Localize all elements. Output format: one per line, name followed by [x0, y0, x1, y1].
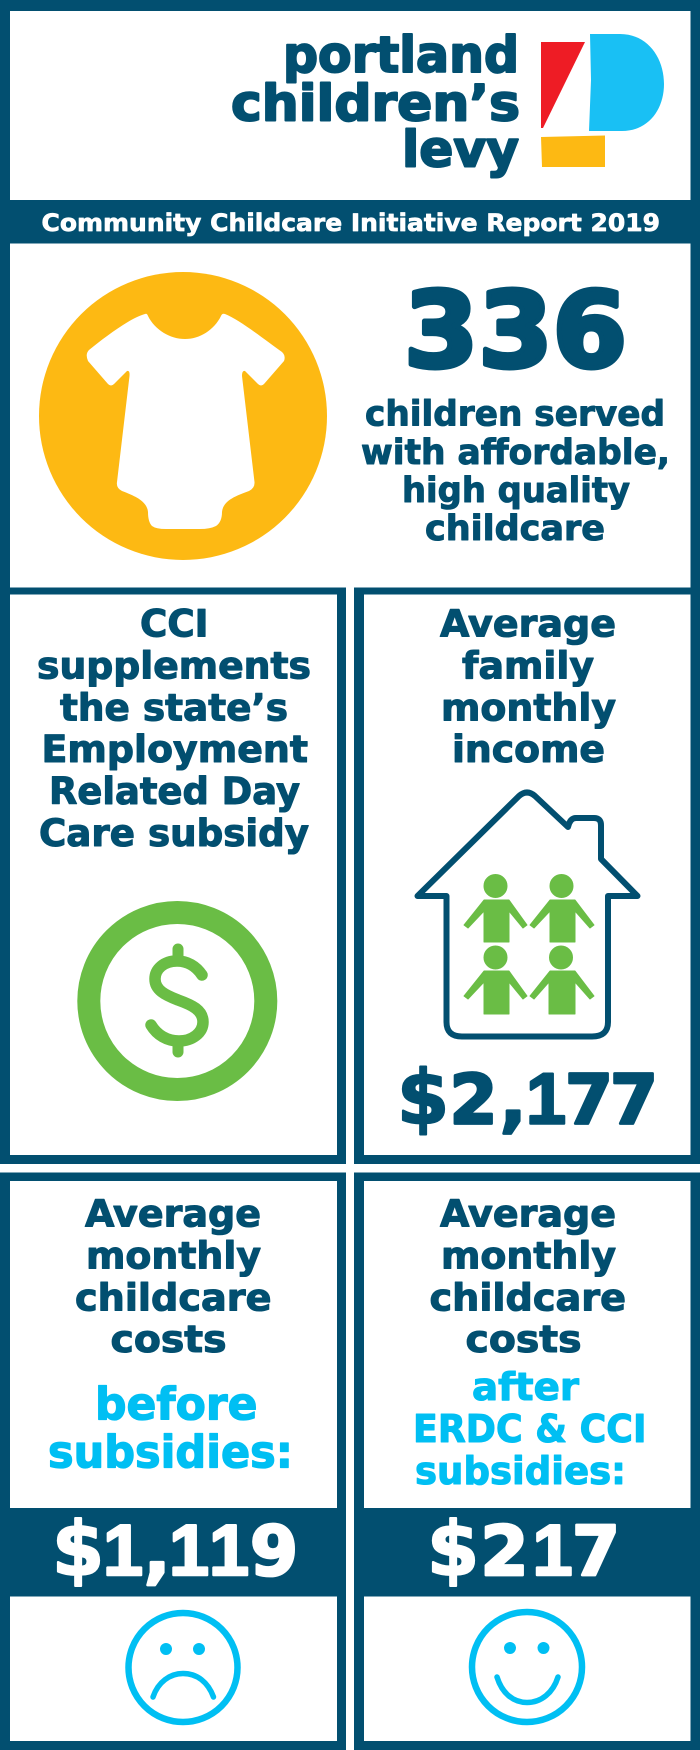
statistic: $1,119: $ — [52, 1505, 104, 1593]
text: before subsidies: subsidies: — [48, 1428, 293, 1478]
icon: happy face — [472, 1612, 582, 1722]
panel: costs after subsidies — [364, 1181, 690, 1741]
text: children served description: children served — [365, 394, 665, 434]
statistic: $217: 2 — [480, 1512, 529, 1592]
text: average family monthly income — [440, 602, 616, 771]
logo wordmark: children’s — [231, 74, 520, 132]
text: children served description: high quality — [402, 471, 630, 511]
icon: dollar coin — [89, 912, 266, 1090]
text: average monthly childcare costs: childcare — [430, 1276, 626, 1320]
text: children served description: childcare — [425, 509, 605, 549]
statistic: $2,177: , — [500, 1060, 526, 1140]
statistic: 336: 336 — [404, 270, 627, 392]
panel: family income — [364, 594, 690, 1155]
statistic: $2,177: 2 — [450, 1060, 498, 1140]
panel: logo — [10, 11, 690, 200]
text: average monthly childcare costs — [430, 1192, 626, 1361]
text: average monthly childcare costs: monthly — [441, 1234, 616, 1278]
panel: costs before subsidies — [10, 1181, 337, 1741]
text: after ERDC and CCI subsidies — [413, 1365, 646, 1494]
logo wordmark: portland — [283, 26, 519, 84]
text: average monthly childcare costs: monthly — [86, 1234, 261, 1278]
heading band: Community Childcare Initiative Report 2019 — [42, 209, 660, 237]
statistic: $1,119: , — [144, 1512, 170, 1592]
text: children served description — [361, 394, 670, 549]
icon: baby onesie — [39, 272, 327, 560]
text: CCI supplements: CCI — [140, 602, 208, 646]
text: average monthly childcare costs: costs — [110, 1318, 226, 1361]
logo wordmark — [231, 26, 520, 178]
text: after ERDC and CCI subsidies: subsidies: — [415, 1449, 626, 1494]
text: average monthly childcare costs: childcare — [75, 1276, 272, 1320]
text: average monthly childcare costs: Average — [440, 1192, 616, 1236]
logo mark — [541, 34, 664, 167]
text: CCI supplements: Care subsidy — [39, 812, 309, 855]
statistic: $217: $ — [427, 1505, 479, 1593]
text: average family monthly income: monthly — [441, 686, 616, 730]
text: after ERDC and CCI subsidies: ERDC & CCI — [413, 1407, 646, 1452]
text: average monthly childcare costs: Average — [85, 1192, 261, 1236]
statistic: $217: 1 — [532, 1511, 573, 1591]
text: CCI supplements: Employment — [42, 728, 308, 771]
statistic: $2,177: 7 — [565, 1060, 613, 1140]
text: after ERDC and CCI subsidies: after — [472, 1365, 579, 1410]
statistic: $2,177: 7 — [610, 1060, 658, 1140]
statistic: $1,119: 1 — [209, 1511, 249, 1591]
panel: CCI subsidy — [10, 594, 337, 1155]
statistic: $2,177: 1 — [526, 1060, 566, 1140]
panel: children served — [10, 244, 690, 588]
text: before subsidies: before — [95, 1380, 258, 1430]
statistic: $1,119: 1 — [103, 1511, 143, 1591]
statistic: $217: 7 — [572, 1512, 620, 1592]
statistic: $1,119: 1 — [169, 1511, 209, 1591]
icon: house with family — [418, 792, 638, 1036]
icon: sad face — [128, 1613, 238, 1722]
text: CCI supplements — [37, 602, 311, 855]
text: CCI supplements: Related Day — [49, 770, 300, 813]
text: average family monthly income: income — [452, 728, 605, 771]
logo wordmark: levy — [402, 120, 519, 178]
text: CCI supplements: supplements — [37, 644, 311, 688]
text: average family monthly income: family — [462, 644, 594, 688]
text: average monthly childcare costs — [75, 1192, 272, 1361]
text: before subsidies — [48, 1380, 293, 1478]
statistic: $2,177: $ — [397, 1054, 449, 1142]
text: CCI supplements: the state’s — [60, 686, 288, 730]
statistic: $1,119: 9 — [250, 1512, 298, 1592]
text: average monthly childcare costs: costs — [466, 1318, 582, 1361]
text: average family monthly income: Average — [440, 602, 616, 646]
text: children served description: with affordable, — [361, 433, 670, 473]
